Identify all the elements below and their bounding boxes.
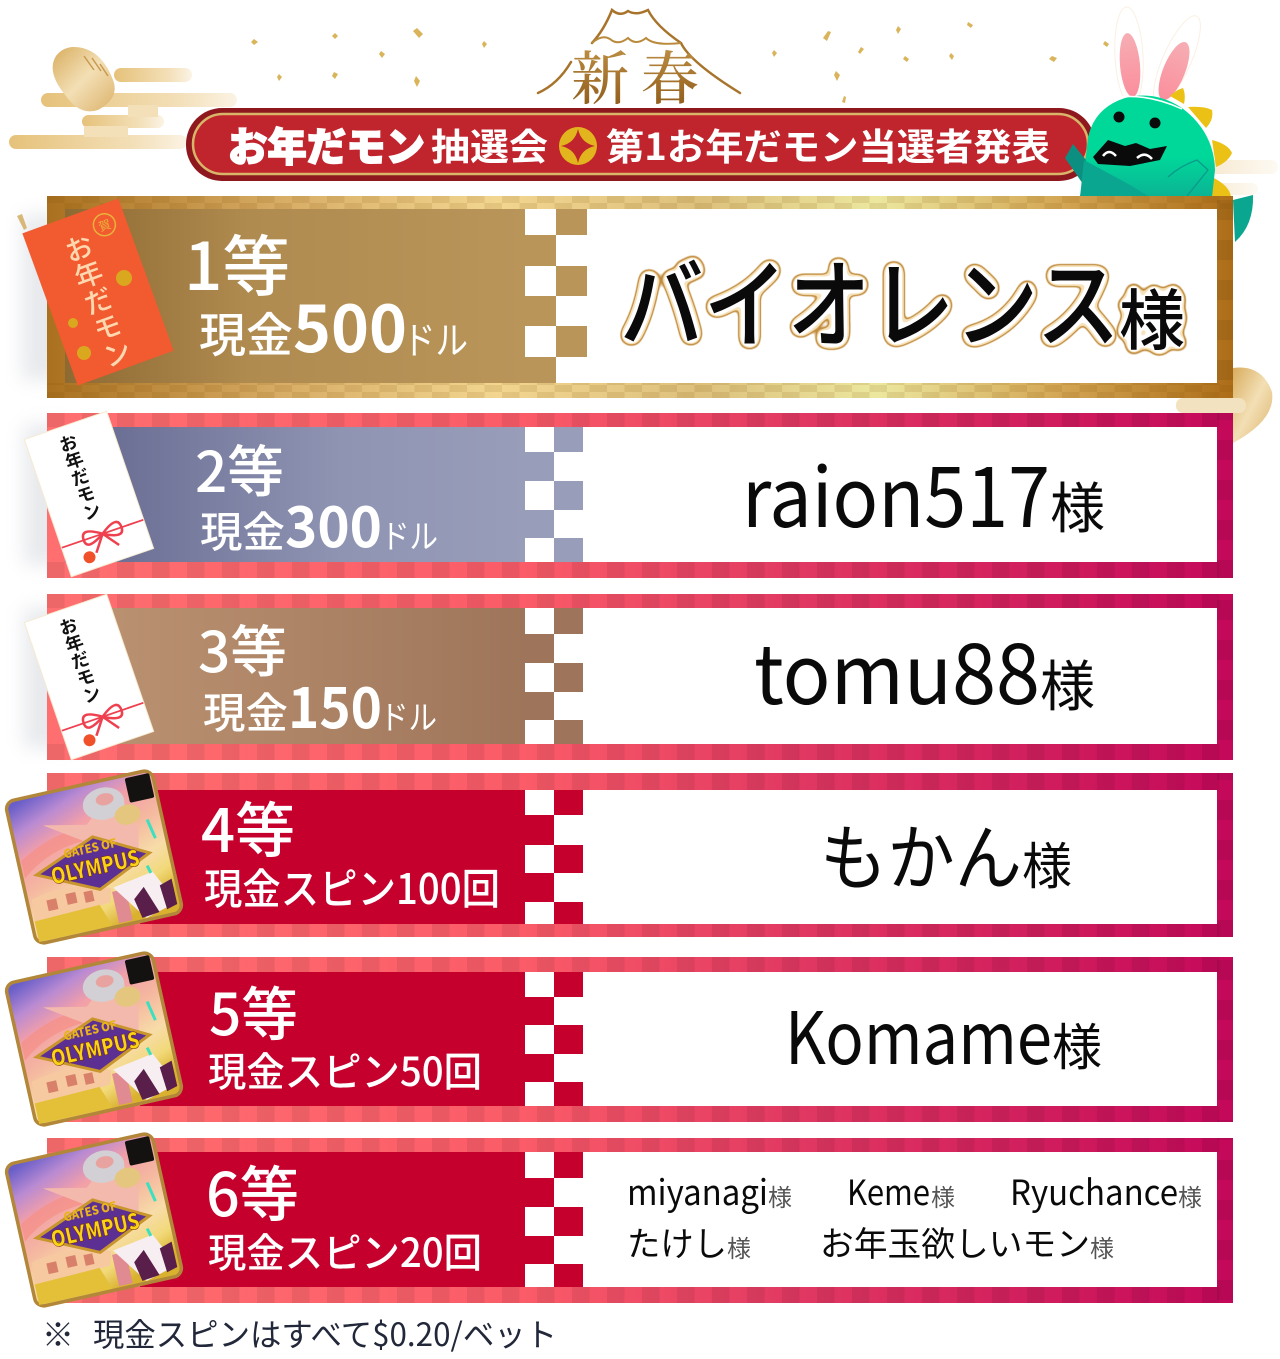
checker divider bbox=[525, 427, 583, 562]
game tile 6th: Gates of Olympus bbox=[5, 1132, 183, 1308]
white envelope 2nd bbox=[24, 411, 154, 577]
winner names bbox=[627, 1165, 1202, 1266]
winner names: 様 bbox=[1178, 1178, 1202, 1213]
right mochi ornament bbox=[1176, 368, 1272, 443]
white envelope 2nd: お年だモン bbox=[53, 430, 107, 524]
orange envelope: 賀 bbox=[96, 215, 113, 235]
white envelope 3rd: お年だモン bbox=[53, 613, 107, 707]
panel: 4th prize bbox=[47, 773, 1233, 937]
winner names: 様 bbox=[727, 1229, 751, 1264]
prize label: ドル bbox=[381, 510, 438, 558]
title text left: 抽選会 bbox=[431, 117, 548, 171]
prize label: 3等 bbox=[198, 608, 287, 689]
winner names: 様 bbox=[1090, 1229, 1114, 1264]
checker divider bbox=[525, 209, 587, 383]
prize label: 現金 bbox=[203, 680, 288, 741]
prize label bbox=[201, 783, 500, 917]
winner names: 様 bbox=[931, 1178, 955, 1213]
footnote: ※ bbox=[42, 1310, 74, 1356]
prize label: 150 bbox=[288, 664, 382, 744]
winner names: お年玉欲しいモン bbox=[820, 1217, 1090, 1266]
coin icon bbox=[559, 127, 597, 165]
winner name: 様 bbox=[1040, 642, 1095, 722]
white envelope 3rd bbox=[24, 594, 154, 760]
game tile 5th: Gates of Olympus: GATES OF bbox=[62, 1016, 118, 1044]
checker divider bbox=[525, 972, 583, 1106]
prize label: 500 bbox=[293, 279, 407, 371]
winner names: たけし bbox=[627, 1217, 727, 1266]
prize label: 300 bbox=[285, 483, 382, 563]
prize label bbox=[198, 608, 437, 744]
prize label: 現金 bbox=[199, 297, 293, 366]
orange envelope: お年だモン bbox=[55, 228, 141, 373]
winner names: Keme bbox=[847, 1165, 930, 1216]
panel: 5th prize bbox=[47, 957, 1233, 1122]
game tile 5th: Gates of Olympus bbox=[5, 951, 183, 1127]
winner name: 様 bbox=[1119, 268, 1185, 364]
checker divider bbox=[525, 790, 583, 924]
winner name: raion517 bbox=[742, 432, 1050, 551]
panel: 1st prize bbox=[47, 196, 1233, 398]
panel: 6th prize bbox=[47, 1138, 1233, 1303]
checker divider bbox=[525, 1152, 583, 1287]
game tile 4th: Gates of Olympus: GATES OF bbox=[62, 834, 118, 862]
panel: 2nd prize bbox=[47, 413, 1233, 578]
winner name: バイオレンス bbox=[620, 227, 1120, 368]
winner name: 様 bbox=[1050, 464, 1105, 544]
prize label bbox=[206, 1147, 482, 1279]
winner name: もかん bbox=[820, 800, 1022, 905]
prize label: ドル bbox=[403, 310, 468, 365]
prize label bbox=[208, 968, 482, 1098]
winner names: miyanagi bbox=[627, 1165, 768, 1216]
gold confetti bbox=[251, 22, 1109, 103]
footnote: 現金スピンはすべて$0.20/ベット bbox=[93, 1310, 557, 1356]
checker divider bbox=[525, 608, 583, 744]
prize label: ドル bbox=[380, 691, 437, 739]
prize label: 6等 bbox=[206, 1147, 299, 1234]
dragon mascot with rabbit ears bbox=[1065, 6, 1253, 242]
prize label bbox=[184, 214, 468, 371]
prize label: 現金スピン50回 bbox=[208, 1040, 482, 1098]
prize label: 現金スピン20回 bbox=[208, 1221, 482, 1279]
left moon and gold clouds bbox=[9, 47, 237, 149]
title text left bbox=[228, 115, 548, 173]
game tile 4th: Gates of Olympus: OLYMPUS bbox=[48, 841, 142, 891]
winner name: Komame bbox=[785, 980, 1052, 1085]
envelope shadows bbox=[22, 215, 82, 748]
prize label: 現金スピン100回 bbox=[204, 856, 500, 917]
panel: 3rd prize bbox=[47, 594, 1233, 760]
winner name: 様 bbox=[1052, 1008, 1102, 1080]
prize label: 現金 bbox=[200, 499, 285, 560]
new year heading with Mt Fuji: 新春 bbox=[571, 32, 699, 116]
prize label: 5等 bbox=[209, 968, 298, 1052]
orange envelope bbox=[17, 198, 174, 386]
title text right: 第1お年だモン当選者発表 bbox=[606, 117, 1050, 171]
winner names: 様 bbox=[768, 1178, 792, 1213]
prize label bbox=[195, 428, 438, 563]
title banner bbox=[186, 108, 1095, 181]
game tile 6th: Gates of Olympus: GATES OF bbox=[62, 1197, 118, 1225]
prize label: 4等 bbox=[201, 783, 295, 870]
game tile 4th: Gates of Olympus bbox=[5, 769, 183, 945]
winner name: tomu88 bbox=[754, 609, 1040, 728]
winner name: 様 bbox=[1022, 827, 1072, 899]
new year heading with Mt Fuji bbox=[538, 10, 740, 116]
game tile 6th: Gates of Olympus: OLYMPUS bbox=[48, 1204, 142, 1254]
prize label: 2等 bbox=[195, 428, 284, 509]
prize label: 1等 bbox=[184, 214, 290, 310]
title text left: お年だモン bbox=[228, 115, 425, 173]
right clouds bbox=[1205, 160, 1278, 195]
game tile 5th: Gates of Olympus: OLYMPUS bbox=[48, 1023, 142, 1073]
winner names: Ryuchance bbox=[1010, 1165, 1178, 1216]
